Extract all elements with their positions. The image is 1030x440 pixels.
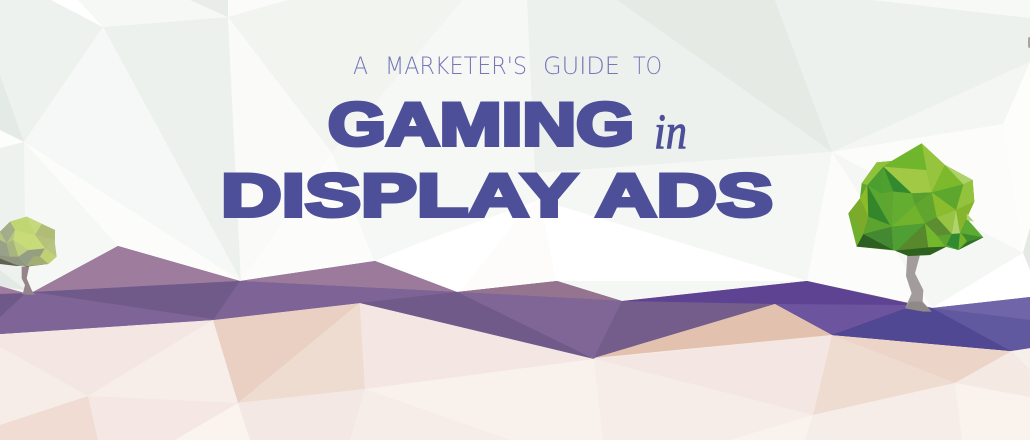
hills: low-poly purple ridge: [0, 246, 1030, 359]
title block: [221, 52, 773, 229]
heading: display ads: DISPLAY ADS: [221, 162, 773, 229]
ground: low-poly peach foreground: [0, 303, 1030, 440]
subtitle: TO: [633, 52, 662, 80]
subtitle: MARKETER'S: [385, 52, 527, 80]
background: low-poly sky: [0, 0, 1030, 340]
subtitle: GUIDE: [543, 52, 620, 80]
icon: clipped tree edge at right: [1028, 37, 1030, 48]
subtitle: A: [353, 52, 368, 80]
heading: in: in: [654, 103, 687, 159]
tree trunk: [905, 255, 932, 312]
icon: small pale tree on left: [0, 217, 57, 295]
heading: gaming: GAMING: [328, 91, 634, 158]
tree canopy: [848, 143, 983, 256]
subtitle: [353, 52, 662, 80]
icon: large green low-poly tree: [848, 143, 983, 312]
